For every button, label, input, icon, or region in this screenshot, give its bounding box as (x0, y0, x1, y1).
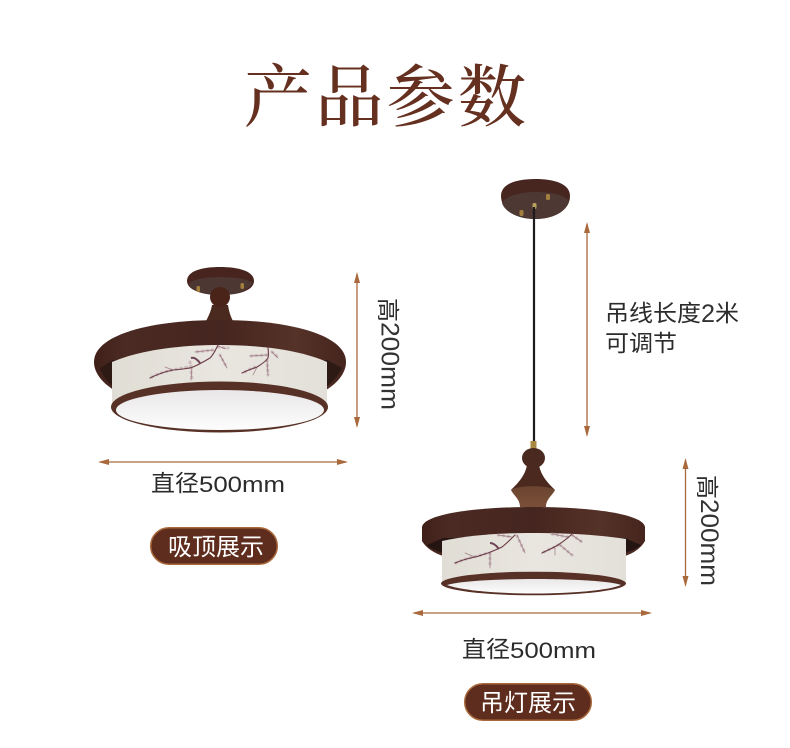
badge: pendant display: 吊灯展示 (480, 683, 576, 718)
height label: pendant lamp: 高 (692, 475, 726, 499)
blossom branch left (455, 535, 525, 568)
ceiling lamp (94, 267, 346, 432)
height label: ceiling lamp: 200mm (376, 322, 404, 410)
icon: pendant canopy (501, 179, 570, 219)
pendant lamp (422, 179, 645, 595)
diameter arrow: ceiling lamp (98, 459, 348, 465)
icon: suspension cable (533, 207, 535, 446)
blossom branch right (542, 534, 582, 555)
cable length label: 米 (715, 294, 739, 328)
diameter label: pendant lamp: 500mm (510, 638, 596, 663)
blossom branch left (150, 345, 228, 380)
bottom trim ring (441, 572, 626, 595)
fabric shade (442, 533, 626, 584)
height label: ceiling lamp (373, 298, 407, 410)
diameter arrow: pendant lamp (412, 610, 652, 616)
wooden ring (422, 507, 645, 556)
ring interior shadow (100, 360, 342, 387)
icon: ball joint and neck (206, 287, 233, 321)
bottom trim ring (111, 382, 328, 432)
wooden ring (94, 320, 346, 390)
white diffuser (447, 579, 621, 594)
ring interior shadow (427, 538, 641, 553)
diameter label: ceiling lamp: 500mm (199, 472, 285, 497)
diameter label: ceiling lamp (151, 464, 285, 498)
diameter label: pendant lamp: 直径 (462, 630, 510, 664)
height arrow: pendant lamp (682, 458, 688, 587)
height arrow: ceiling lamp (354, 272, 360, 428)
cable length label: 2 (701, 300, 715, 328)
badge: ceiling display: 吸顶展示 (168, 527, 264, 562)
cable length label (605, 294, 739, 358)
icon: brass ferrule (530, 441, 536, 449)
white diffuser (116, 390, 324, 430)
blossom branch right (242, 347, 279, 375)
fabric shade (112, 345, 327, 408)
title: 产品参数 (244, 44, 526, 141)
diameter label: pendant lamp (462, 630, 596, 664)
icon: ceiling canopy (187, 267, 254, 295)
height label: pendant lamp: 200mm (695, 499, 723, 586)
cable length arrow (584, 222, 590, 437)
cable length label: 吊线长度 (605, 294, 701, 328)
icon: wooden finial (511, 448, 555, 507)
height label: ceiling lamp: 高 (373, 298, 407, 322)
cable length label: 可调节 (605, 324, 677, 358)
height label: pendant lamp (692, 475, 726, 586)
diameter label: ceiling lamp: 直径 (151, 464, 199, 498)
